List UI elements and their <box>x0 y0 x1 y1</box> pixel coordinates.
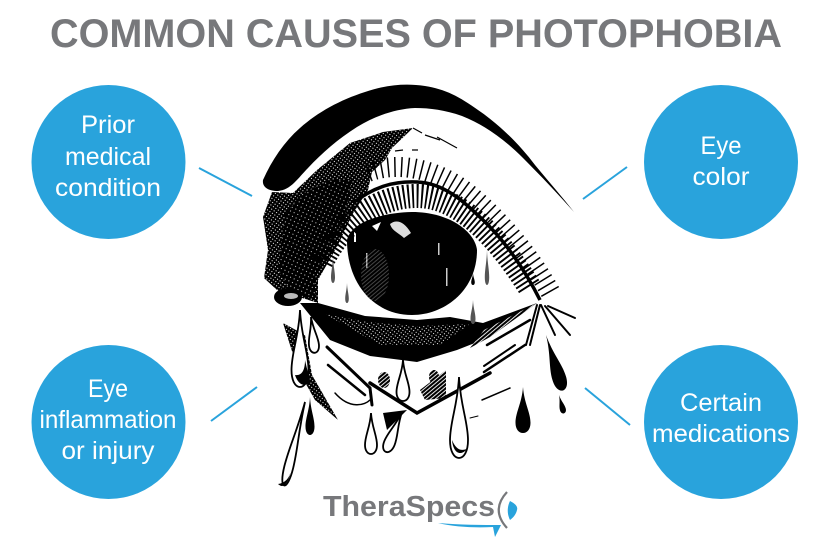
connector: bottom right <box>585 388 630 425</box>
panel: eye color: Eye <box>700 132 742 160</box>
left cheek shading <box>283 323 338 420</box>
panel: certain medications: medications <box>652 420 790 448</box>
panel: eye color: color <box>692 163 750 191</box>
eyebrow <box>263 85 574 212</box>
panel: eye inflammation or injury: Eye <box>88 375 128 403</box>
logo wordmark: TheraSpecs <box>323 491 495 523</box>
connector: top left <box>199 168 252 196</box>
panel: eye inflammation or injury <box>32 345 186 499</box>
brow-lid feathering <box>395 128 457 151</box>
tear shadows <box>278 360 468 486</box>
panel: eye inflammation or injury: inflammation <box>40 406 176 434</box>
lower lid band <box>300 303 537 362</box>
tears <box>280 310 468 487</box>
logo: TheraSpecs <box>323 491 517 537</box>
connector: top right <box>583 167 627 199</box>
upper lashes row <box>368 167 552 295</box>
iris <box>347 212 477 315</box>
lower lid creases <box>327 305 575 418</box>
dark lid mass <box>278 180 352 300</box>
title: COMMON CAUSES OF PHOTOPHOBIA <box>50 12 782 56</box>
panel: prior medical condition: Prior <box>81 111 135 139</box>
lid margin <box>353 182 540 300</box>
under-lid shading patches <box>378 370 446 400</box>
panel: prior medical condition <box>32 85 186 239</box>
illustration: crying eye <box>263 85 575 487</box>
bottom lid shadow <box>383 410 407 430</box>
panel: eye color <box>644 85 798 239</box>
lower lashes row <box>322 196 530 288</box>
iris highlights <box>354 221 448 301</box>
panel: eye inflammation or injury: or injury <box>62 437 155 465</box>
logo lens icon <box>499 492 517 528</box>
dark tears <box>306 273 570 435</box>
lacrimal caruncle <box>274 288 302 306</box>
panel: certain medications: Certain <box>680 389 762 417</box>
panel: prior medical condition: medical <box>65 143 151 171</box>
upper lid shading <box>263 128 413 303</box>
logo swoosh <box>438 523 501 537</box>
connector: bottom left <box>211 387 257 421</box>
panel: prior medical condition: condition <box>55 174 161 202</box>
panel: certain medications <box>644 345 798 499</box>
small tears on eye <box>331 250 489 324</box>
